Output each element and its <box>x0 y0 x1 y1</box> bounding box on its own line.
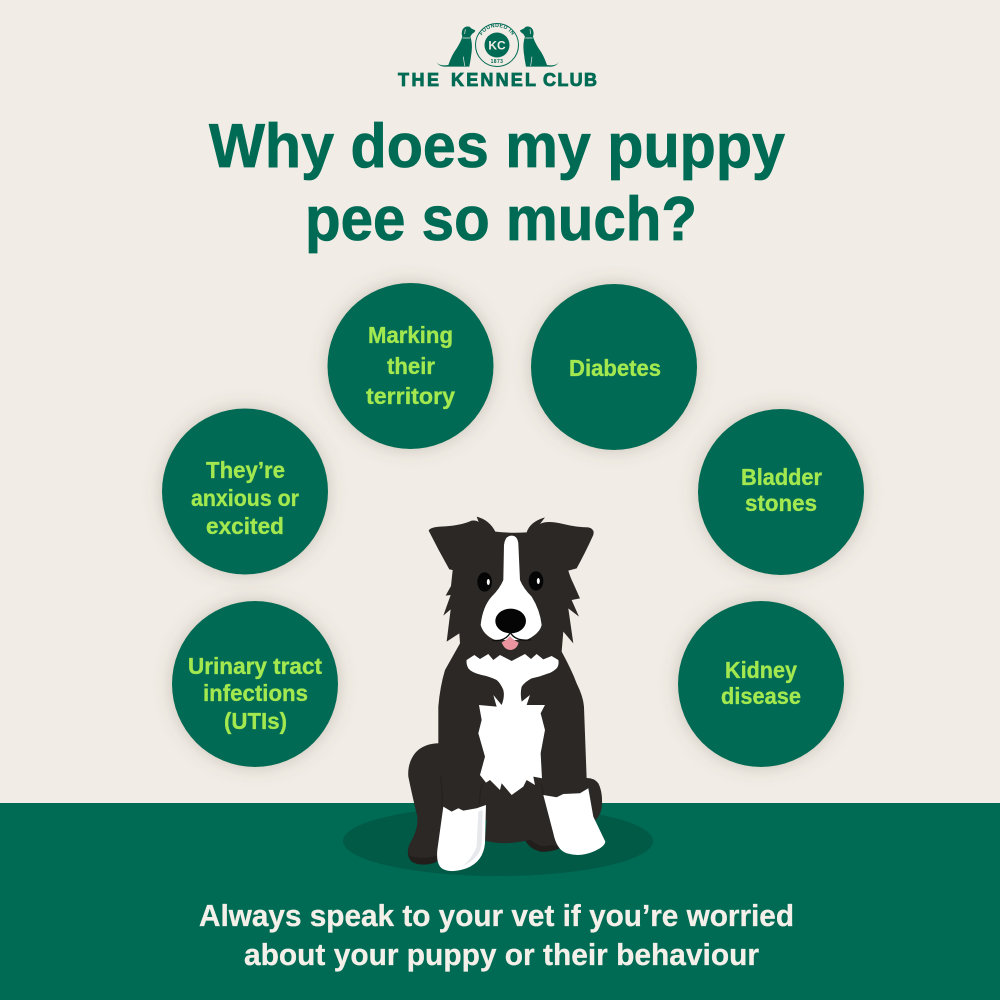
title <box>209 112 785 254</box>
circle: marking their territory: Marking <box>368 322 453 348</box>
circle: anxious or excited: They’re <box>206 457 285 483</box>
title: Why does my puppy <box>209 112 785 181</box>
circle: marking their territory <box>328 283 494 449</box>
circle: kidney disease: Kidney <box>725 657 797 683</box>
illustration: border collie puppy <box>408 517 605 871</box>
circle: marking their territory: territory <box>366 383 455 409</box>
white blaze <box>481 536 542 640</box>
circle: urinary tract infections: Urinary tract <box>188 653 322 679</box>
circle: bladder stones: stones <box>745 490 817 516</box>
hind leg right <box>563 778 602 822</box>
body and head silhouette <box>429 517 594 847</box>
logo wordmark: THE <box>398 70 439 90</box>
circle: urinary tract infections: (UTIs) <box>224 708 287 734</box>
nose and mouth <box>493 609 531 641</box>
leg separation lines <box>441 777 543 808</box>
icon: founded roundel: FOUNDED IN <box>480 23 514 36</box>
tongue <box>502 636 519 650</box>
icon: founded roundel: KC <box>488 38 506 52</box>
circle: anxious or excited <box>162 408 328 574</box>
circle: diabetes <box>531 284 697 450</box>
icon: right seated dog <box>520 26 559 67</box>
hind leg left <box>408 743 445 865</box>
circle: diabetes: Diabetes <box>569 355 661 381</box>
circle: marking their territory: their <box>387 353 435 379</box>
logo wordmark: CLUB <box>543 70 597 90</box>
hind paw right <box>523 812 560 852</box>
eyes <box>477 571 543 592</box>
footer message: about your puppy or their behaviour <box>244 937 759 972</box>
title: pee so much? <box>305 185 697 254</box>
circle: bladder stones: Bladder <box>741 464 822 490</box>
white foreleg left <box>437 805 486 871</box>
circle: kidney disease: disease <box>721 683 801 709</box>
circle: bladder stones <box>698 409 864 575</box>
icon: left seated dog <box>436 26 475 67</box>
footer message: Always speak to your vet if you’re worried <box>199 898 794 933</box>
logo wordmark <box>398 70 597 90</box>
circle: urinary tract infections: infections <box>203 680 308 706</box>
icon: founded roundel: 1873 <box>491 59 503 65</box>
logo wordmark: KENNEL <box>451 70 536 90</box>
circle: urinary tract infections <box>172 601 338 767</box>
circle: kidney disease <box>678 601 844 767</box>
green ground band <box>0 803 1000 1000</box>
circle: anxious or excited: anxious or <box>191 485 299 511</box>
icon: founded roundel <box>475 23 519 67</box>
logo: The Kennel Club <box>398 23 597 90</box>
footer message <box>199 898 794 972</box>
circle: anxious or excited: excited <box>206 513 284 539</box>
white chest <box>467 654 559 795</box>
white foreleg right <box>543 788 605 855</box>
dog ground shadow <box>343 806 653 876</box>
